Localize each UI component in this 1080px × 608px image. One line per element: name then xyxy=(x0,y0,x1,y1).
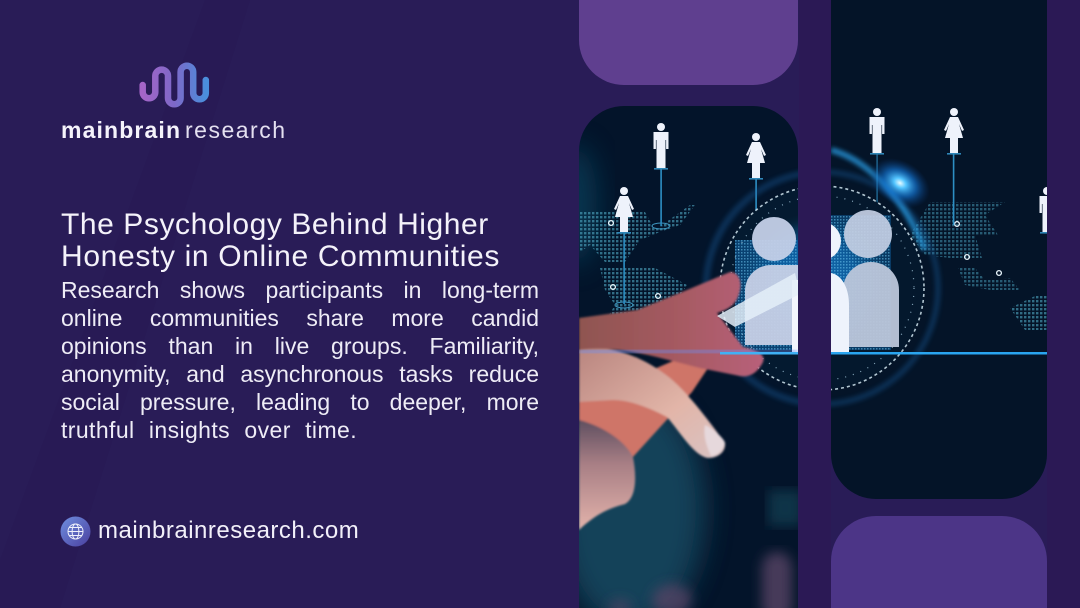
icon: woman figure xyxy=(746,133,766,180)
dotted world map xyxy=(910,202,1047,330)
body text: online communities share more candid xyxy=(61,305,539,331)
body text xyxy=(61,277,539,443)
blue light line xyxy=(831,352,1047,354)
hand: lower finger xyxy=(579,420,635,530)
globe right half xyxy=(831,145,942,408)
blue light line xyxy=(579,350,798,353)
hand xyxy=(579,272,764,530)
light flare xyxy=(874,160,928,206)
large person icon xyxy=(745,217,798,352)
logo icon xyxy=(143,66,206,104)
body text: opinions than in live groups. Familiarity, xyxy=(61,333,539,359)
large person icon xyxy=(831,210,899,352)
website icon: globe xyxy=(60,516,90,546)
panel: right photo xyxy=(831,0,1047,499)
website url: mainbrainresearch.com xyxy=(98,517,359,544)
hand: pink behind fingers xyxy=(579,358,712,458)
body text: anonymity, and asynchronous tasks reduce xyxy=(61,361,539,387)
light pen xyxy=(717,273,798,327)
hand: fingernail xyxy=(704,425,725,456)
title: Honesty in Online Communities xyxy=(61,240,500,273)
body text: Research shows participants in long-term xyxy=(61,277,539,303)
hand: top finger and thumb xyxy=(579,272,764,376)
icon: partial man figure xyxy=(1040,187,1047,234)
icon: woman figure left xyxy=(614,187,634,234)
hand: index finger xyxy=(579,348,725,458)
panel: left photo xyxy=(579,106,798,608)
title xyxy=(61,208,500,273)
blurred fingertips xyxy=(608,552,792,608)
globe left half xyxy=(701,170,798,406)
logo wordmark xyxy=(61,117,285,143)
panel: bottom purple block xyxy=(831,516,1047,608)
body text: truthful insights over time. xyxy=(61,417,357,443)
dotted world map xyxy=(580,205,694,314)
logo wordmark: mainbrain xyxy=(61,117,180,143)
icon: man figure xyxy=(654,123,668,170)
body text: social pressure, leading to deeper, more xyxy=(61,389,539,415)
icon: woman figure xyxy=(944,108,964,155)
title: The Psychology Behind Higher xyxy=(61,208,489,241)
icon: man figure xyxy=(870,108,884,155)
logo wordmark: research xyxy=(185,117,285,143)
panel: top purple block xyxy=(579,0,798,85)
